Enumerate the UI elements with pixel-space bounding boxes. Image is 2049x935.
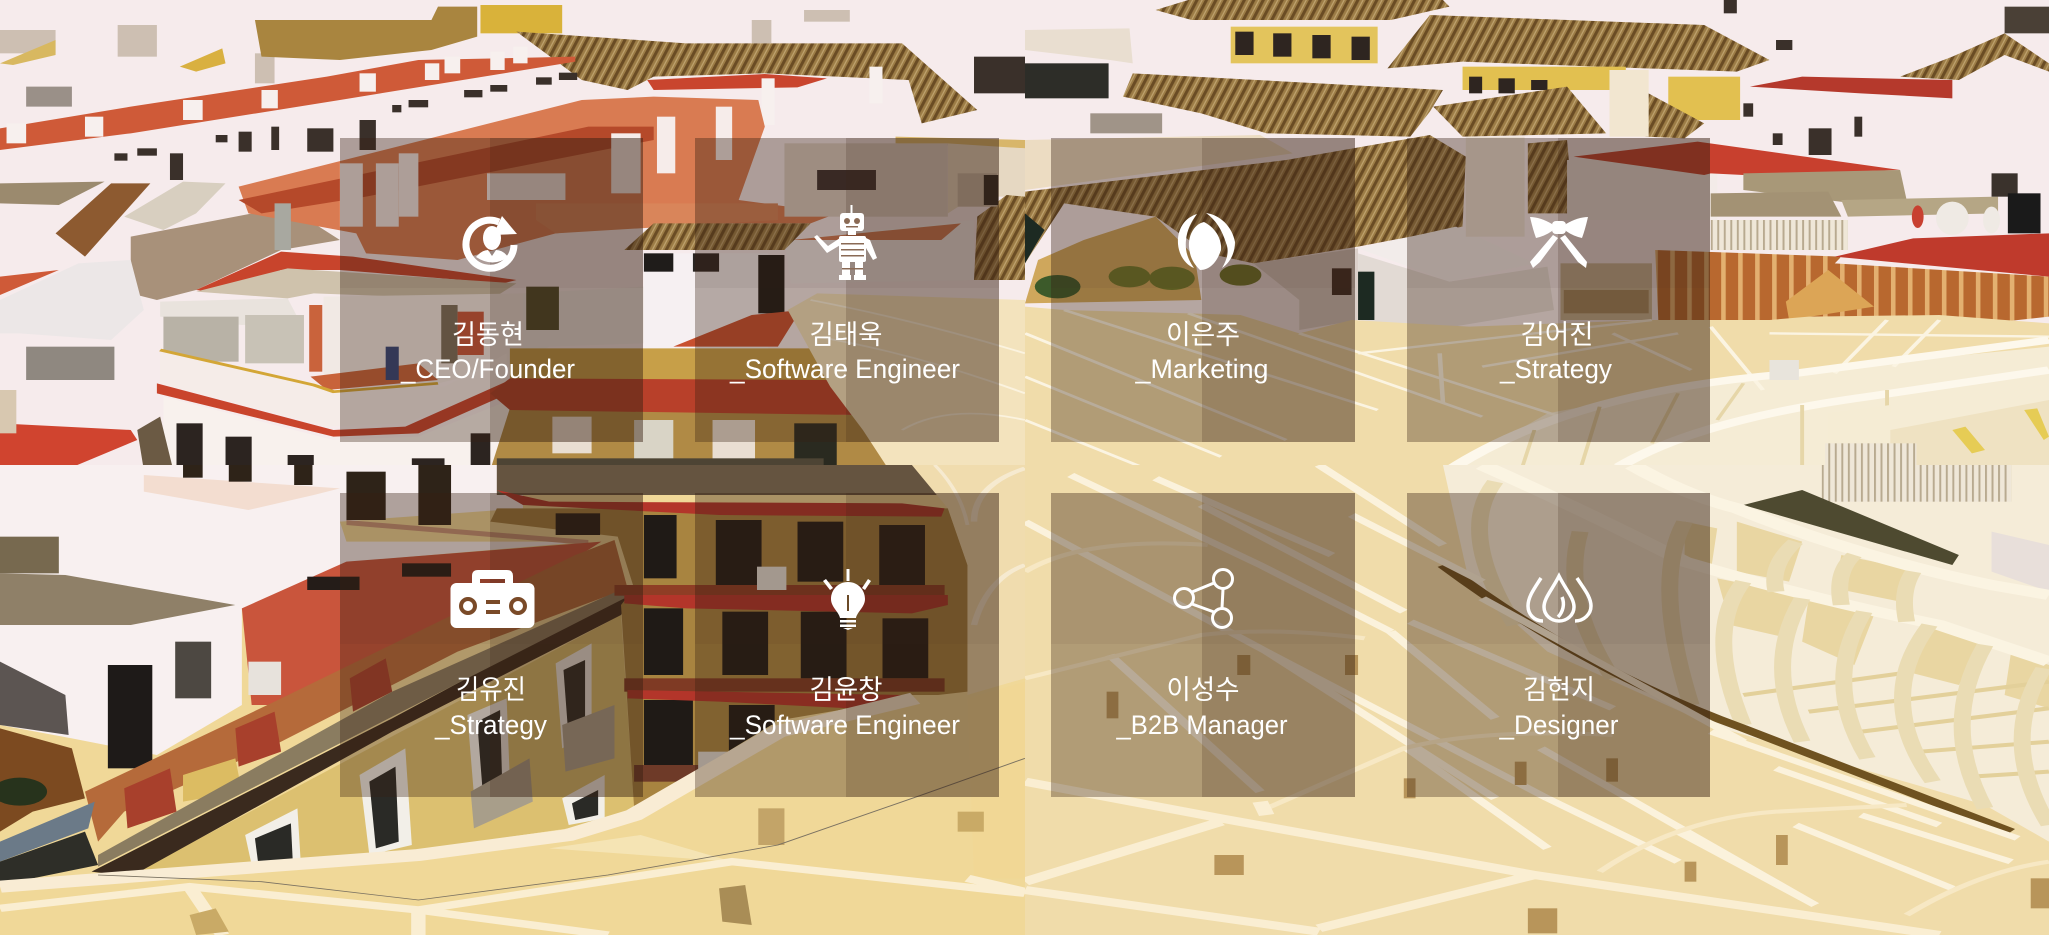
name: 김동현 [452, 320, 524, 350]
role: _Software Engineer [729, 354, 960, 384]
role: _Designer [1499, 710, 1618, 740]
name: 김태욱 [810, 320, 882, 350]
role: _Strategy [434, 710, 547, 740]
name: 김어진 [1520, 320, 1594, 350]
name: 김유진 [456, 675, 526, 705]
panel: 김태욱 Software Engineer [695, 138, 999, 442]
role: _Marketing [1135, 354, 1268, 384]
background photo: rooftops upper left [0, 0, 1025, 465]
name: 이성수 [1166, 675, 1240, 705]
panel: 이성수 B2B Manager [1051, 493, 1355, 797]
panel: 이은주 Marketing [1051, 138, 1355, 442]
panel: 김현지 Designer [1407, 493, 1710, 797]
role: _Strategy [1499, 354, 1612, 384]
role: _CEO/Founder [400, 354, 575, 384]
icon: bow [1530, 217, 1588, 268]
icon: water drops [1528, 576, 1591, 621]
icon: globe [1178, 213, 1235, 270]
name: 김윤창 [810, 675, 882, 705]
panel: 김동현 CEO/Founder [340, 138, 643, 442]
background photo: apartment block lower left [0, 465, 1025, 935]
icon: share network [1174, 570, 1232, 628]
panel: 김어진 Strategy [1407, 138, 1710, 442]
name: 이은주 [1166, 320, 1240, 350]
icon: robot [814, 205, 877, 280]
panel: 김윤창 Software Engineer [695, 493, 999, 797]
background photo: rooftops upper right [1025, 0, 2049, 465]
icon: boombox radio [450, 570, 534, 628]
icon: circular arrow with person [466, 216, 517, 268]
icon: light bulb [823, 569, 871, 630]
role: _B2B Manager [1116, 710, 1288, 740]
name: 김현지 [1523, 675, 1595, 705]
panel: 김유진 Strategy [340, 493, 643, 797]
role: _Software Engineer [729, 710, 960, 740]
background photo: Metropol Parasol structure lower right [1025, 465, 2049, 935]
